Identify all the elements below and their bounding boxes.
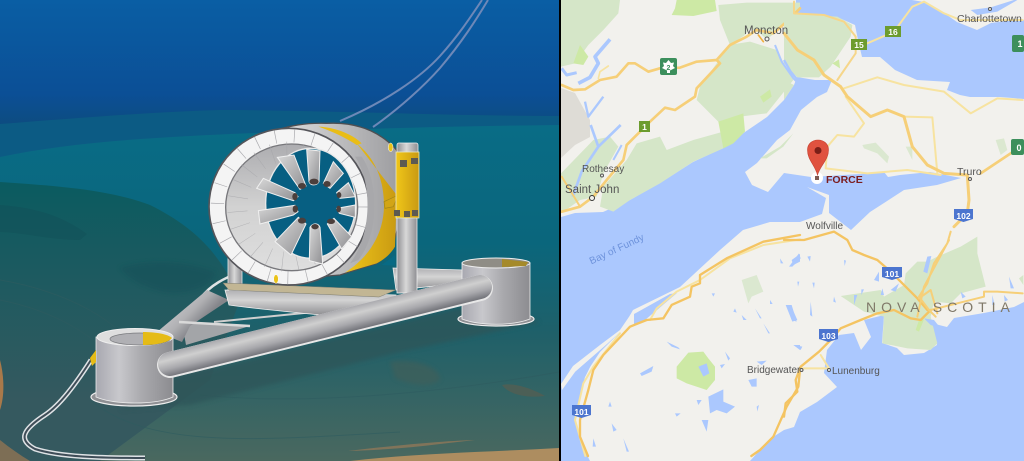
marker Moncton	[765, 37, 769, 41]
blade 6	[327, 218, 352, 249]
front main tube	[170, 287, 480, 365]
bright park Halifax	[916, 319, 924, 332]
Lake two	[786, 305, 797, 322]
ring grey side	[350, 156, 370, 263]
seabed dark shapes	[0, 205, 215, 293]
blade 1	[277, 155, 306, 189]
marker Charlottetown	[988, 8, 992, 10]
south-east map region	[784, 232, 1023, 417]
label Rothesay: Rothesay	[582, 164, 624, 175]
bright park south	[718, 113, 745, 148]
Digby neck	[561, 311, 633, 390]
cable yellow connector	[90, 350, 96, 366]
thin strut one	[179, 322, 250, 326]
Lake streak	[667, 342, 680, 349]
yellow band top	[318, 127, 362, 145]
park Halifax	[841, 237, 986, 350]
clamp lower bolts	[394, 210, 418, 217]
shield: route 2	[660, 58, 677, 75]
Lake northeast	[787, 305, 797, 322]
root cap right	[337, 192, 341, 198]
teal gap under housing	[382, 255, 395, 266]
root cap bottom	[311, 224, 319, 229]
shield: route 1 partial: 1	[1017, 39, 1023, 49]
marker Lunenburg	[828, 368, 830, 372]
Lake west	[640, 366, 653, 376]
blade 10	[257, 178, 298, 201]
pale park three	[996, 138, 1007, 155]
pin centre	[814, 147, 822, 154]
local road	[598, 66, 608, 78]
cable loop behind frame	[202, 276, 228, 294]
label Bridgewater: Bridgewater	[747, 365, 801, 376]
tube body	[170, 287, 480, 364]
seabed	[0, 125, 559, 461]
Petitcodiac river	[775, 45, 798, 83]
pale park edge	[1019, 275, 1023, 285]
dark rock	[502, 384, 545, 397]
Saint John river lower	[573, 125, 621, 197]
label Moncton: Moncton	[744, 25, 788, 37]
park central	[697, 42, 793, 123]
left can rim	[97, 328, 173, 346]
label Wolfville: Wolfville	[806, 221, 843, 232]
shield: route 16	[885, 26, 901, 37]
park east of Moncton	[784, 5, 852, 77]
Saint John road	[562, 177, 580, 207]
right flange	[458, 312, 534, 326]
highway shields	[572, 26, 1024, 418]
Bedford Basin	[924, 318, 941, 328]
root cap upper-left	[298, 183, 306, 189]
label Truro: Truro	[957, 166, 982, 178]
Lake Rossignol	[708, 389, 735, 413]
Grand Lake	[578, 39, 610, 83]
root cap top	[309, 179, 319, 185]
yellow latch top	[388, 143, 393, 152]
seabed dark-green patch	[0, 182, 240, 461]
upper cable 1	[340, 0, 482, 121]
root cap left	[293, 205, 298, 213]
blade root caps	[292, 179, 341, 229]
Prince Edward Island	[912, 0, 1024, 30]
hub opening	[266, 148, 356, 258]
shield: route 102: 102	[956, 211, 971, 221]
root cap lower-right	[327, 219, 335, 224]
left can body	[96, 337, 173, 403]
shield: route 103	[819, 329, 838, 342]
roads south-east	[784, 232, 1023, 417]
bright park top	[672, 0, 717, 16]
park Moncton north	[718, 3, 800, 45]
inner funnel	[226, 144, 358, 271]
Moncton spur	[758, 35, 763, 42]
shield: route 101 east	[882, 267, 902, 280]
blade 8	[275, 217, 306, 255]
lakes south-east	[786, 253, 1014, 350]
sea	[561, 0, 1024, 461]
pale parks	[862, 138, 1007, 163]
roads north-east	[784, 2, 1023, 227]
panel: location map	[561, 0, 1024, 461]
frame shadow on seabed	[177, 307, 533, 405]
Lake near Bridgewater	[748, 378, 757, 387]
city markers	[590, 8, 992, 372]
blade 3	[323, 162, 343, 188]
Highway 101	[580, 235, 800, 456]
roads south-west	[575, 235, 800, 456]
brown bottom-right	[350, 448, 559, 461]
blade 7	[309, 224, 323, 264]
label Bay of Fundy: Bay of Fundy	[588, 232, 646, 267]
rotor blades	[257, 149, 355, 264]
label Lunenburg: Lunenburg	[832, 366, 880, 377]
right anchor can	[458, 258, 534, 326]
shield: route 101 east: 101	[885, 269, 899, 279]
brown bottom-left corner	[0, 440, 30, 461]
lakes south-west	[593, 254, 800, 452]
coastal road	[844, 77, 1023, 113]
shield: route 103: 103	[821, 331, 836, 341]
upper cable 2	[373, 0, 488, 127]
park Rothesay	[561, 137, 618, 213]
label FORCE: FORCE	[826, 174, 863, 186]
park top-left	[561, 0, 620, 67]
Kejimkujik park	[677, 352, 715, 390]
marker Rothesay	[600, 174, 604, 177]
cable core	[25, 360, 145, 458]
seabed contour lines	[0, 280, 400, 439]
left rim yellow wedge	[143, 332, 172, 345]
secondary south shore	[801, 355, 829, 368]
cable outer	[25, 360, 145, 458]
sediment brown patches	[0, 360, 559, 461]
lower strut plate	[184, 324, 246, 345]
post cap	[397, 143, 418, 155]
highway 1	[562, 60, 720, 212]
Halifax network	[917, 232, 951, 317]
bright small park	[760, 89, 772, 103]
root cap mid-right	[336, 206, 341, 212]
marker Saint John	[590, 196, 594, 200]
under-turbine tube	[225, 290, 396, 315]
Eastern shore road	[931, 292, 1023, 310]
left diagonal tube	[157, 290, 229, 342]
shield: route 104 partial	[1011, 139, 1024, 155]
shield: route 2: 2	[667, 65, 671, 72]
funnel segment lines	[237, 152, 337, 262]
Highway 101 east	[784, 232, 927, 310]
yellow latch bottom	[274, 275, 278, 283]
dark patch centre	[120, 262, 215, 293]
shield: route 1: 1	[642, 122, 647, 132]
Highway 103 east	[784, 310, 931, 417]
bright parks north-west	[573, 0, 772, 148]
right can body	[462, 263, 530, 324]
Petitcodiac river north-east	[784, 60, 799, 82]
yellow clamp	[396, 152, 419, 218]
post shaft	[397, 215, 417, 293]
roads north-west	[562, 8, 800, 212]
brown left edge	[0, 360, 3, 410]
front ring outer	[209, 128, 369, 285]
park coast east	[760, 133, 793, 158]
shield: route 102	[954, 209, 973, 222]
yellow band side	[345, 143, 397, 273]
left anchor can	[91, 328, 177, 406]
shield: route 1 partial	[1012, 35, 1024, 52]
marker Bridgewater	[800, 368, 803, 372]
export cable on seabed	[25, 360, 145, 458]
north-east map region	[784, 0, 1023, 227]
housing body	[282, 122, 397, 277]
panel divider	[559, 0, 561, 461]
left flange	[91, 388, 177, 406]
small lakes	[794, 256, 1014, 350]
Highway 103	[751, 370, 800, 456]
blade 2	[307, 149, 320, 185]
place labels	[565, 13, 1022, 377]
shield: route 101 west: 101	[574, 407, 589, 417]
water background	[0, 0, 559, 130]
rivers and lakes north-west	[562, 39, 798, 197]
Charlottetown harbour	[971, 0, 1017, 15]
bright small park west	[573, 45, 588, 65]
beige top plate	[223, 283, 396, 297]
Truro link	[904, 117, 937, 173]
pale park one	[862, 143, 889, 163]
shield: route 1	[639, 121, 650, 132]
turbine	[209, 123, 402, 285]
Lake four	[923, 256, 931, 273]
Kejimkujik lake	[698, 363, 709, 377]
Kennebecasis	[613, 145, 622, 160]
label Charlottetown: Charlottetown	[957, 13, 1022, 25]
road north	[794, 2, 856, 80]
Light parallel road	[575, 239, 800, 456]
label Saint John: Saint John	[565, 184, 619, 196]
pin anchor	[815, 176, 819, 180]
dark patch left	[0, 205, 87, 240]
tube white outline	[170, 288, 480, 365]
root cap lower-left	[298, 218, 306, 224]
vertical mount post	[394, 143, 419, 293]
blade 5	[337, 205, 355, 217]
power cables up to surface	[340, 0, 488, 127]
park south coast	[600, 132, 723, 212]
Lake south	[702, 420, 708, 432]
river near edge	[562, 68, 577, 75]
St Marys bay	[575, 332, 620, 377]
park sliver south of river	[784, 80, 794, 100]
root cap upper left side	[292, 193, 298, 200]
small lakes scatter	[593, 254, 800, 452]
mainland	[561, 0, 1024, 461]
ring segment ticks	[217, 136, 362, 278]
shield: route 15	[851, 39, 867, 50]
pin halo	[811, 172, 823, 184]
shield: route 101 west	[572, 405, 591, 418]
shield: route 16: 16	[888, 27, 898, 37]
left rim hole	[110, 333, 170, 345]
root cap upper-right	[323, 181, 331, 187]
frame rear tube	[393, 268, 464, 290]
seabed horizon band	[0, 110, 559, 157]
clamp upper bolts	[400, 158, 418, 167]
bright triangle park	[832, 59, 840, 68]
blade 4	[337, 183, 355, 198]
parks north-west	[561, 0, 800, 213]
thin strut two	[214, 312, 314, 322]
Truro east highway	[981, 147, 1023, 173]
brown streak	[348, 440, 475, 451]
Saint John river upper	[585, 97, 603, 117]
turbine support leg	[228, 258, 242, 290]
right can rim	[462, 258, 530, 268]
right rim yellow wedge	[502, 259, 528, 267]
Secondary road to bridge	[867, 2, 1023, 43]
Lake one	[789, 253, 801, 267]
grey USA area	[561, 88, 590, 158]
Lake three	[874, 272, 879, 282]
shield: route 15: 15	[854, 40, 864, 50]
blade 9	[258, 205, 298, 224]
Annapolis basin	[634, 293, 677, 325]
marker Truro	[968, 178, 972, 180]
shield: route 104 partial: 0	[1016, 143, 1022, 153]
panel: tidal turbine illustration	[0, 0, 559, 461]
south-west map region	[575, 235, 800, 456]
highway 2 casing	[562, 8, 800, 90]
Parrsboro shore road	[826, 97, 941, 175]
speckled seabed patch	[392, 361, 438, 384]
map pin: FORCE	[808, 140, 863, 186]
label Nova Scotia: NOVA SCOTIA	[866, 299, 1015, 315]
road east of Moncton	[790, 33, 800, 50]
north-west map region	[561, 0, 800, 213]
pale wildlife park	[742, 275, 763, 303]
pin body	[808, 140, 828, 175]
yellow fin notch	[384, 196, 396, 209]
Trans-Canada trunk	[784, 33, 969, 227]
pale park two	[906, 147, 912, 160]
